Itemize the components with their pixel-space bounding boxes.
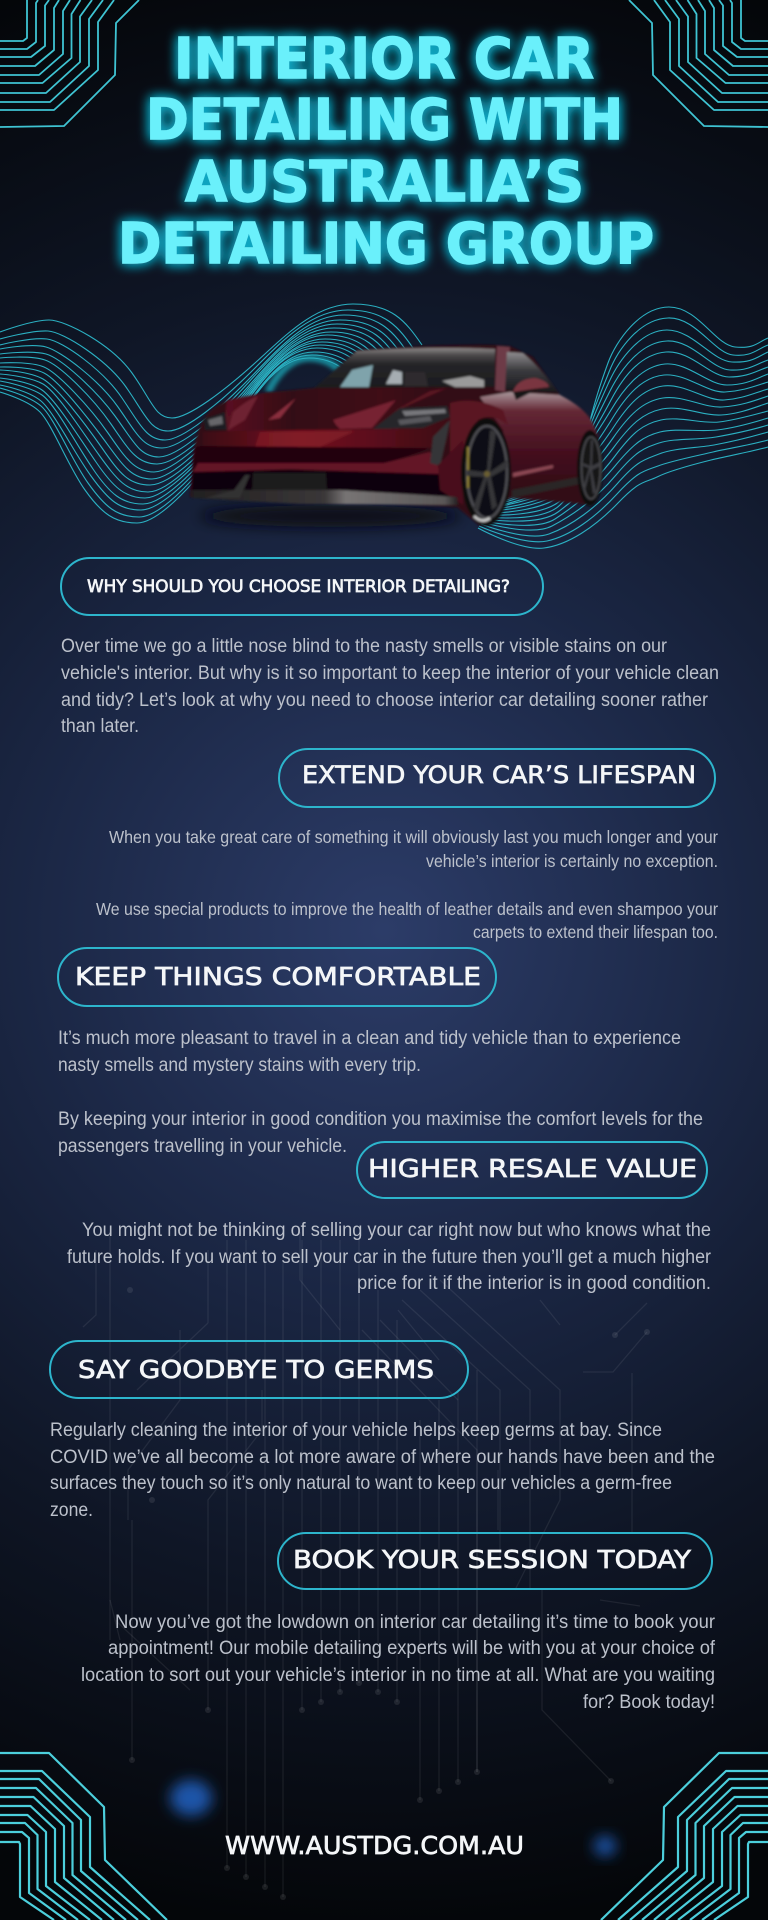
heading pill: book your session today bbox=[278, 1533, 712, 1589]
title: AUSTRALIA’S bbox=[185, 150, 584, 215]
text block: resale: You might not be thinking of selling your car right now but who knows what the bbox=[82, 1220, 711, 1241]
text block: booking: location to sort out your vehicle’s interior in no time at all. What are you waiting bbox=[81, 1665, 715, 1686]
text block: comfort: passengers travelling in your vehicle. bbox=[58, 1136, 347, 1157]
heading pill: book your session today: BOOK YOUR SESSION TODAY bbox=[293, 1545, 692, 1574]
text block: booking: for? Book today! bbox=[583, 1692, 715, 1713]
heading pill: keep things comfortable bbox=[58, 948, 496, 1006]
decoration: blue glow right bbox=[594, 1836, 616, 1856]
text block: introduction: Over time we go a little nose blind to the nasty smells or visible stains on our bbox=[61, 636, 668, 657]
heading pill: extend your car's lifespan: EXTEND YOUR CAR’S LIFESPAN bbox=[302, 761, 696, 789]
text block: germs bbox=[50, 1420, 715, 1521]
text block: booking: Now you’ve got the lowdown on interior car detailing it’s time to book your bbox=[115, 1612, 716, 1633]
text block: comfort: It’s much more pleasant to travel in a clean and tidy vehicle than to experience bbox=[58, 1028, 681, 1049]
text block: germs: COVID we’ve all become a lot more aware of where our hands have been and the bbox=[50, 1447, 715, 1468]
text block: germs: zone. bbox=[50, 1500, 93, 1521]
decoration: top-right circuit corner bbox=[629, 0, 768, 127]
decoration: bottom-left circuit corner bbox=[0, 1753, 167, 1920]
circuit board background pattern bbox=[83, 1232, 650, 1900]
heading pill: higher resale value: HIGHER RESALE VALUE bbox=[368, 1154, 697, 1183]
text block: comfort: nasty smells and mystery stains with every trip. bbox=[58, 1055, 421, 1076]
text block: germs: surfaces they touch so it’s only natural to want to keep our vehicles a germ-free bbox=[50, 1473, 672, 1494]
car: rear wheel bbox=[577, 430, 603, 506]
title bbox=[118, 27, 654, 277]
title: DETAILING WITH bbox=[146, 88, 623, 153]
decoration: top-left circuit corner bbox=[0, 0, 139, 127]
text block: introduction: and tidy? Let’s look at why you need to choose interior car detailing sooner rather bbox=[61, 690, 709, 711]
text block: resale: future holds. If you want to sell your car in the future then you’ll get a much higher bbox=[67, 1247, 712, 1268]
decoration: left wave ribbon bbox=[0, 304, 422, 523]
text block: resale: price for it if the interior is in good condition. bbox=[357, 1273, 711, 1294]
text block: booking: appointment! Our mobile detailing experts will be with you at your choice of bbox=[108, 1638, 716, 1659]
text block: booking bbox=[81, 1612, 716, 1713]
text block: lifespan: vehicle’s interior is certainly no exception. bbox=[426, 851, 718, 871]
website url: WWW.AUSTDG.COM.AU bbox=[225, 1831, 524, 1860]
heading pill: why should you choose interior detailing: WHY SHOULD YOU CHOOSE INTERIOR DETAILING? bbox=[87, 577, 510, 596]
title: DETAILING GROUP bbox=[118, 212, 654, 277]
text block: lifespan: When you take great care of something it will obviously last you much longer and your bbox=[109, 827, 718, 847]
heading pill: why should you choose interior detailing bbox=[61, 558, 543, 615]
text block: lifespan: carpets to extend their lifespan too. bbox=[473, 922, 718, 942]
text block: resale bbox=[67, 1220, 712, 1294]
title: INTERIOR CAR bbox=[174, 27, 594, 92]
heading pill: keep things comfortable: KEEP THINGS COMFORTABLE bbox=[75, 962, 481, 991]
text block: introduction: than later. bbox=[61, 716, 139, 737]
text block: introduction bbox=[61, 636, 719, 737]
decoration: right wave ribbon bbox=[478, 307, 768, 548]
text block: germs: Regularly cleaning the interior of your vehicle helps keep germs at bay. Since bbox=[50, 1420, 662, 1441]
car illustration bbox=[190, 345, 603, 527]
decoration: bottom-right circuit corner bbox=[601, 1753, 768, 1920]
decoration: blue glow left bbox=[170, 1780, 212, 1816]
text block: lifespan: We use special products to improve the health of leather details and even shampoo your bbox=[96, 899, 718, 919]
text block: comfort bbox=[58, 1028, 703, 1157]
text block: lifespan bbox=[96, 827, 718, 942]
heading pill: say goodbye to germs bbox=[50, 1341, 468, 1398]
text block: introduction: vehicle's interior. But why is it so important to keep the interior of your vehicle clean bbox=[61, 663, 719, 684]
text block: comfort: By keeping your interior in good condition you maximise the comfort levels for the bbox=[58, 1109, 703, 1130]
car: front wheel bbox=[461, 418, 511, 526]
heading pill: extend your car's lifespan bbox=[279, 749, 715, 807]
heading pill: higher resale value bbox=[357, 1142, 707, 1198]
heading pill: say goodbye to germs: SAY GOODBYE TO GERMS bbox=[78, 1355, 434, 1384]
